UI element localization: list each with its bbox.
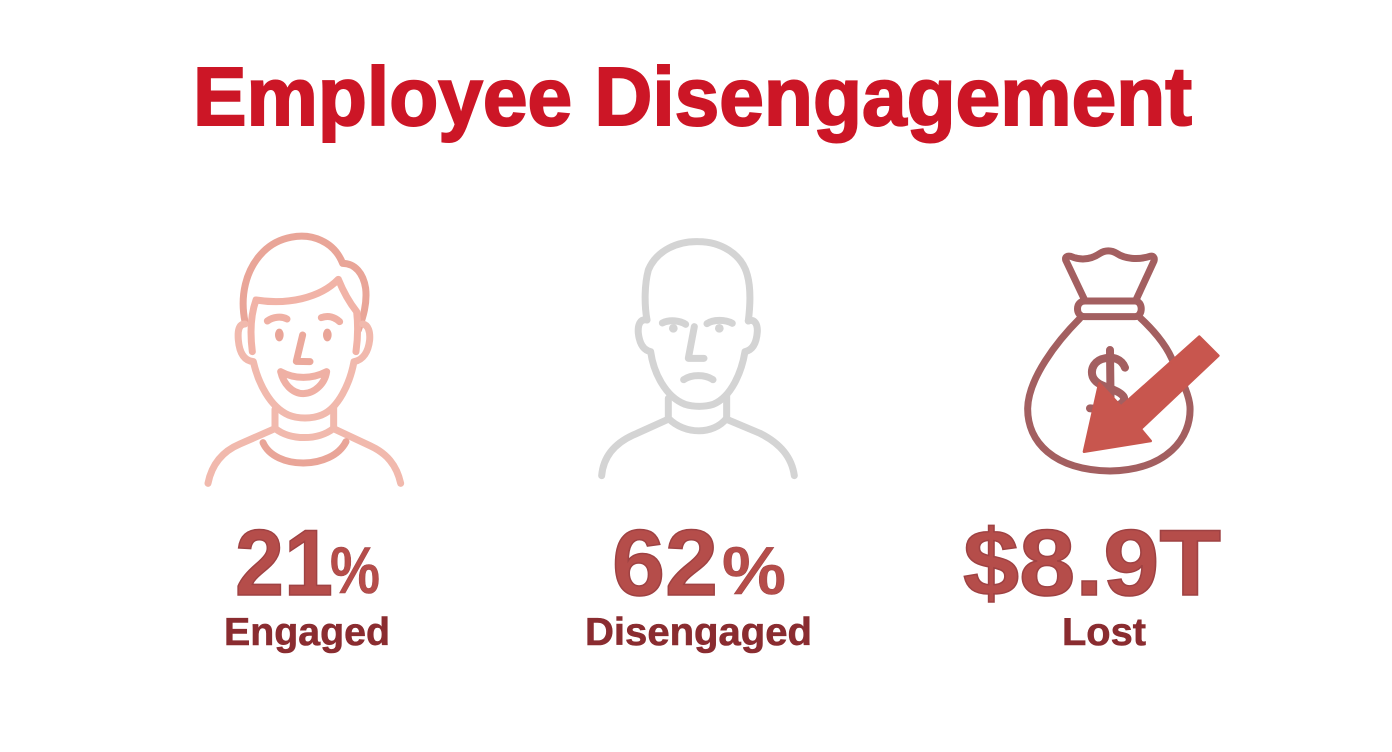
stat: 62% disengaged	[585, 510, 812, 654]
label: Lost	[1062, 611, 1146, 654]
value: 62	[612, 510, 718, 615]
stat: 21% engaged	[224, 510, 390, 654]
icon: disengaged neutral person	[602, 242, 794, 476]
label: Disengaged	[585, 611, 812, 654]
stat: 62% disengaged: %	[722, 533, 786, 609]
label: Engaged	[224, 611, 390, 654]
stat: $8.9T lost	[963, 510, 1221, 654]
money bag outline	[1028, 251, 1190, 471]
value: $8.9T	[963, 510, 1221, 615]
value: 21	[235, 510, 333, 615]
icon: engaged smiling person	[208, 236, 401, 483]
stat: 21% engaged: %	[330, 533, 380, 607]
icon: money bag with down arrow	[1028, 251, 1218, 471]
title: Employee Disengagement	[193, 50, 1192, 143]
arrow pointing down	[1084, 337, 1218, 452]
